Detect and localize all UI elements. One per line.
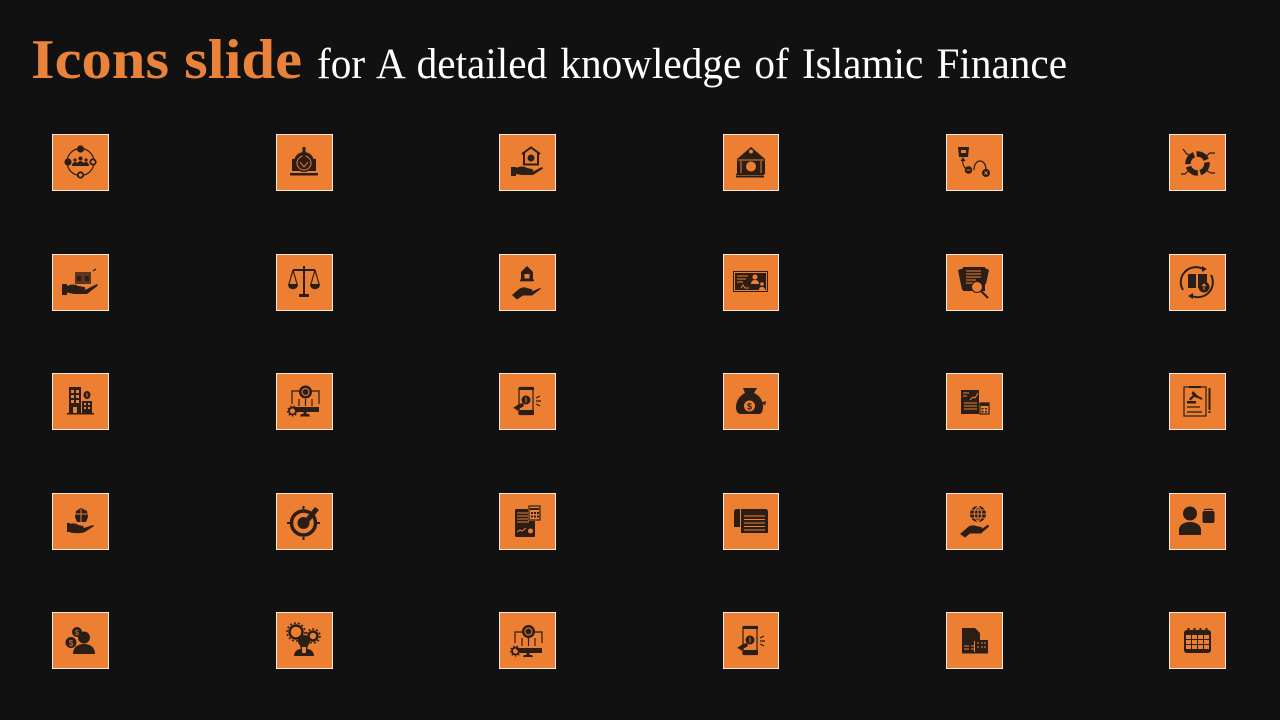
- icon: money bag: $: [747, 402, 752, 412]
- icon: hand holding house with coin: [500, 134, 556, 190]
- icon: hand holding globe: [946, 494, 1002, 550]
- icon: monitor with coin and gear: [276, 374, 332, 430]
- icon: documents with magnifier: [946, 254, 1002, 310]
- icon: cycle with package: [1170, 254, 1226, 310]
- icon: phone with coin: [500, 374, 556, 430]
- icon: path with box and markers: [946, 134, 1002, 190]
- icon: lightbulb with gears: [276, 612, 332, 668]
- icon: calendar: [1170, 612, 1226, 668]
- icon: hand holding cash box: [52, 254, 108, 310]
- icon: monitor with coin and gear: [500, 612, 556, 668]
- icon: office buildings with info: [52, 374, 108, 430]
- icon: identity certificate: [724, 254, 778, 310]
- title: for A detailed knowledge of Islamic Finance: [317, 41, 1067, 88]
- icon: target with arrow: [276, 494, 332, 550]
- icon: documents with coins and calculator: [946, 612, 1002, 668]
- icon: person with briefcase: [1170, 494, 1226, 550]
- icon: person with coins: [52, 612, 108, 668]
- icon: hand holding gift: [52, 494, 108, 550]
- icon: bank building: [724, 134, 778, 190]
- icon: balance scale: [276, 254, 332, 310]
- icon: money bag: [724, 374, 778, 430]
- icon: phone with coin: [724, 612, 778, 668]
- icon: report with calculator: [946, 374, 1002, 430]
- icon: financial statement with calculator: [500, 494, 556, 550]
- title: [31, 29, 1067, 91]
- icon: hand with padlock house: [500, 254, 556, 310]
- icon: legal document with gavel: [1170, 374, 1226, 430]
- icon: network of people and coins: [52, 134, 108, 190]
- icon: gear with down arrow: [276, 134, 332, 190]
- icon: scroll document: [724, 494, 778, 550]
- icon: segmented circular process: [1170, 134, 1226, 190]
- icon: person with coins: $: [69, 639, 74, 648]
- icon: person with coins: $: [75, 630, 79, 637]
- title: Icons slide: [31, 29, 302, 91]
